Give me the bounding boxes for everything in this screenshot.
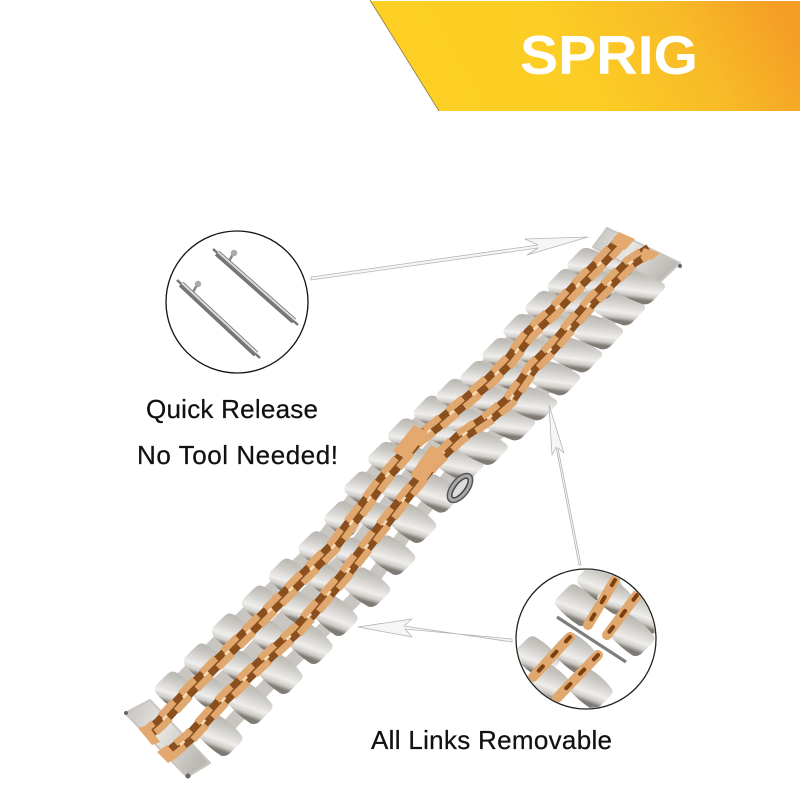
label: quick release: Quick Release	[146, 394, 318, 424]
header banner	[370, 0, 800, 111]
band: right row of links	[193, 267, 669, 759]
watch band	[124, 228, 682, 778]
band: bottom end link	[125, 700, 210, 777]
arrow: to band top	[311, 237, 588, 280]
band: top end link	[593, 228, 680, 282]
icon: spring bar 1	[213, 249, 298, 325]
panel: quick release pins	[166, 231, 308, 373]
label: no tool needed: No Tool Needed!	[137, 440, 338, 470]
band: end pins	[124, 264, 682, 778]
icon: spring bar 2	[177, 280, 260, 358]
label: all links removable: All Links Removable	[371, 725, 612, 755]
band: middle row of links	[189, 247, 645, 712]
band: left row of links	[151, 245, 616, 712]
icon: clasp button	[442, 469, 478, 507]
band: silver under-layer	[173, 262, 640, 735]
detail: disassembled links	[518, 570, 655, 708]
arrow: to band middle	[549, 405, 581, 565]
band: rose gold strands	[143, 237, 653, 760]
arrow: to band lower	[358, 619, 512, 642]
panel: removable links	[515, 568, 657, 710]
band: gold plates at clasp and ends	[138, 232, 660, 763]
logo: SPRIG: SPRIG	[520, 24, 698, 86]
